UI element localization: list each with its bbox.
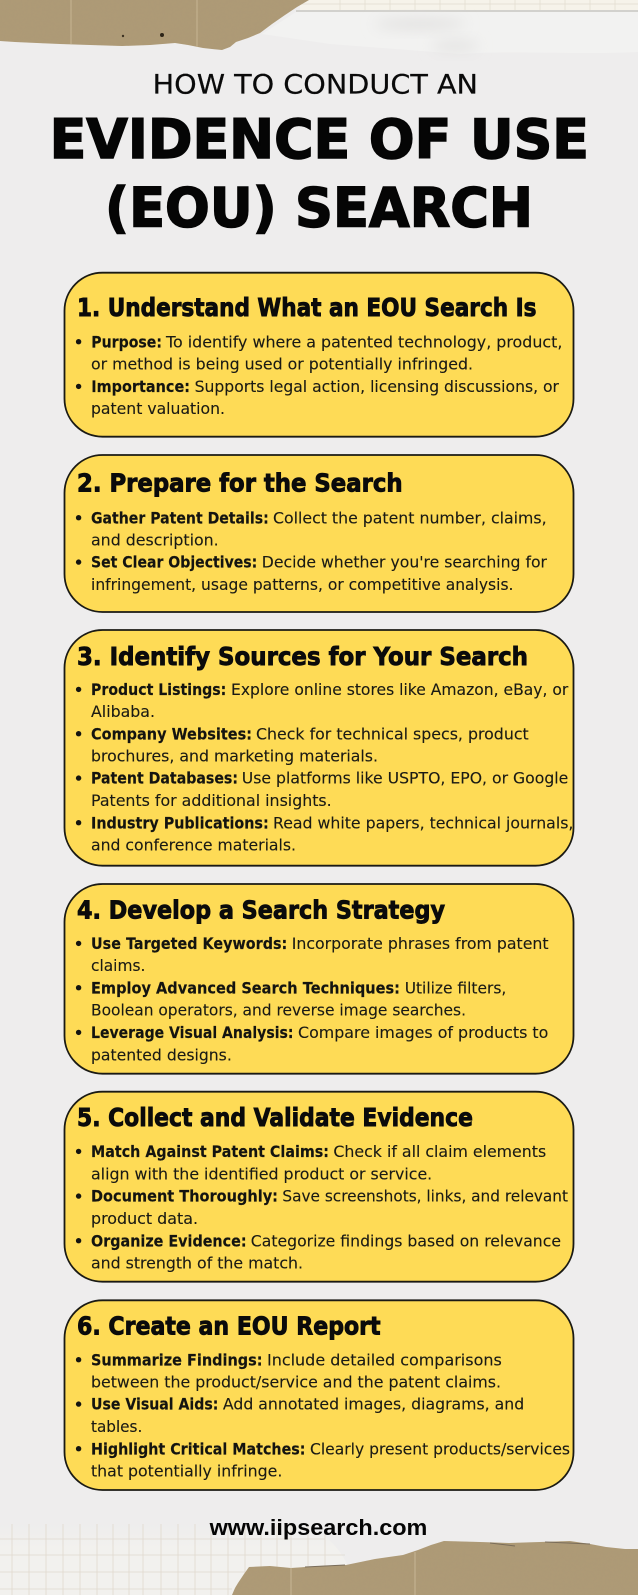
panel: 6 create an EOU report — [64, 1300, 574, 1490]
heading 5: 5. Collect and Validate Evidence — [77, 1103, 473, 1132]
bullet: employ advanced search techniques — [76, 978, 506, 1020]
bullet: purpose — [76, 332, 562, 373]
bullet: patent databases: Use platforms like USPTO, EPO, or Google — [242, 769, 568, 788]
bullet: highlight critical matches: Clearly present products/services — [310, 1439, 570, 1458]
bullet: summarize findings: between the product/service and the patent claims. — [91, 1373, 501, 1392]
bullet: importance: Importance: — [91, 377, 190, 396]
bullet: document thoroughly: Save screenshots, links, and relevant — [282, 1187, 568, 1206]
bullet: product listings: Product Listings: — [91, 680, 226, 699]
bullet: product listings: Explore online stores like Amazon, eBay, or — [231, 680, 569, 699]
bullet: use targeted keywords: Use Targeted Keywords: — [91, 934, 287, 953]
heading 2: 2. Prepare for the Search — [77, 469, 403, 498]
bullet: match against patent claims — [76, 1142, 546, 1183]
bullet: leverage visual analysis: Compare images of products to — [298, 1023, 548, 1042]
bullet: highlight critical matches — [76, 1439, 570, 1481]
bullet: employ advanced search techniques: Boolean operators, and reverse image searches. — [91, 1001, 466, 1020]
bullet: summarize findings: Include detailed comparisons — [267, 1350, 502, 1369]
bullet: purpose: Purpose: — [91, 332, 162, 351]
heading 1: 1. Understand What an EOU Search Is — [77, 293, 536, 322]
bullet: patent databases: Patent Databases: — [91, 769, 238, 788]
bullet: document thoroughly: Document Thoroughly: — [91, 1187, 278, 1206]
bullet: gather patent details: Gather Patent Details: — [91, 508, 269, 527]
heading 3: 3. Identify Sources for Your Search — [77, 642, 528, 671]
bullet: match against patent claims: align with the identified product or service. — [91, 1164, 432, 1183]
bullet: leverage visual analysis — [76, 1023, 548, 1064]
bullet: set clear objectives — [76, 553, 547, 594]
bullet: industry publications — [76, 813, 573, 855]
bullet: set clear objectives: Decide whether you're searching for — [262, 553, 547, 572]
bullet: importance: Supports legal action, licensing discussions, or — [195, 377, 559, 396]
bullet: organize evidence: Categorize findings based on relevance — [251, 1231, 561, 1250]
bullet: use visual aids: Add annotated images, diagrams, and — [223, 1395, 524, 1414]
bullet: match against patent claims: Match Against Patent Claims: — [91, 1142, 329, 1161]
bullet: leverage visual analysis: Leverage Visual Analysis: — [91, 1023, 294, 1042]
bullet: company websites: Company Websites: — [91, 724, 252, 743]
bullet: product listings: Alibaba. — [91, 702, 155, 721]
panel: 5 collect and validate evidence — [64, 1092, 574, 1282]
bullet: company websites: brochures, and marketing materials. — [91, 747, 378, 766]
bullet: organize evidence — [76, 1231, 561, 1272]
bullet: use visual aids — [76, 1395, 524, 1436]
title: main line 1: EVIDENCE OF USE — [50, 107, 589, 171]
bullet: industry publications: Industry Publications: — [91, 813, 269, 832]
bullet: gather patent details: and description. — [91, 530, 219, 549]
bullet: importance — [76, 377, 559, 418]
bullet: leverage visual analysis: patented designs. — [91, 1045, 232, 1064]
bullet: patent databases — [76, 769, 568, 810]
bullet: highlight critical matches: that potentially infringe. — [91, 1462, 282, 1481]
bullet: use targeted keywords — [76, 934, 549, 975]
bullet: importance: patent valuation. — [91, 399, 225, 418]
bullet: gather patent details — [76, 508, 547, 549]
bullet: employ advanced search techniques: Employ Advanced Search Techniques: — [91, 978, 400, 997]
bullet: industry publications: and conference materials. — [91, 836, 296, 855]
panel: 4 develop a search strategy — [64, 884, 574, 1074]
bullet: use visual aids: Use Visual Aids: — [91, 1395, 218, 1414]
heading 4: 4. Develop a Search Strategy — [77, 895, 445, 924]
bullet: organize evidence: Organize Evidence: — [91, 1231, 247, 1250]
bullet: document thoroughly — [76, 1187, 568, 1228]
bullet: employ advanced search techniques: Utilize filters, — [405, 978, 506, 997]
bullet: gather patent details: Collect the patent number, claims, — [273, 508, 547, 527]
title: kicker line: HOW TO CONDUCT AN — [153, 70, 478, 101]
bullet: company websites — [76, 724, 529, 766]
bullet: highlight critical matches: Highlight Critical Matches: — [91, 1439, 306, 1458]
title — [50, 70, 589, 240]
bullet: industry publications: Read white papers, technical journals, — [273, 813, 573, 832]
bullet: patent databases: Patents for additional insights. — [91, 791, 332, 810]
heading 6: 6. Create an EOU Report — [77, 1311, 381, 1340]
top torn kraft paper — [0, 0, 309, 50]
panel: 3 identify sources for your search — [64, 630, 574, 866]
bullet: purpose: To identify where a patented technology, product, — [165, 332, 562, 351]
website url: www.iipsearch.com — [209, 1515, 427, 1540]
bullet: document thoroughly: product data. — [91, 1209, 198, 1228]
bullet: summarize findings: Summarize Findings: — [91, 1350, 262, 1369]
bullet: summarize findings — [76, 1350, 502, 1392]
bullet: set clear objectives: infringement, usage patterns, or competitive analysis. — [91, 575, 514, 594]
panel: 1 understand what an EOU search is — [64, 273, 574, 437]
bottom torn kraft paper — [232, 1541, 638, 1595]
title: main line 2: (EOU) SEARCH — [105, 176, 533, 240]
bullet: use visual aids: tables. — [91, 1417, 142, 1436]
bullet: use targeted keywords: claims. — [91, 956, 145, 975]
panel: 2 prepare for the search — [64, 455, 574, 612]
bullet: organize evidence: and strength of the match. — [91, 1253, 303, 1272]
bullet: match against patent claims: Check if all claim elements — [333, 1142, 546, 1161]
top right graph paper — [262, 0, 638, 54]
bullet: company websites: Check for technical specs, product — [256, 724, 529, 743]
bullet: purpose: or method is being used or potentially infringed. — [91, 354, 473, 373]
bottom left graph paper — [0, 1522, 348, 1595]
bullet: set clear objectives: Set Clear Objectives: — [91, 553, 257, 572]
bullet: product listings — [76, 680, 569, 721]
bullet: use targeted keywords: Incorporate phrases from patent — [292, 934, 549, 953]
